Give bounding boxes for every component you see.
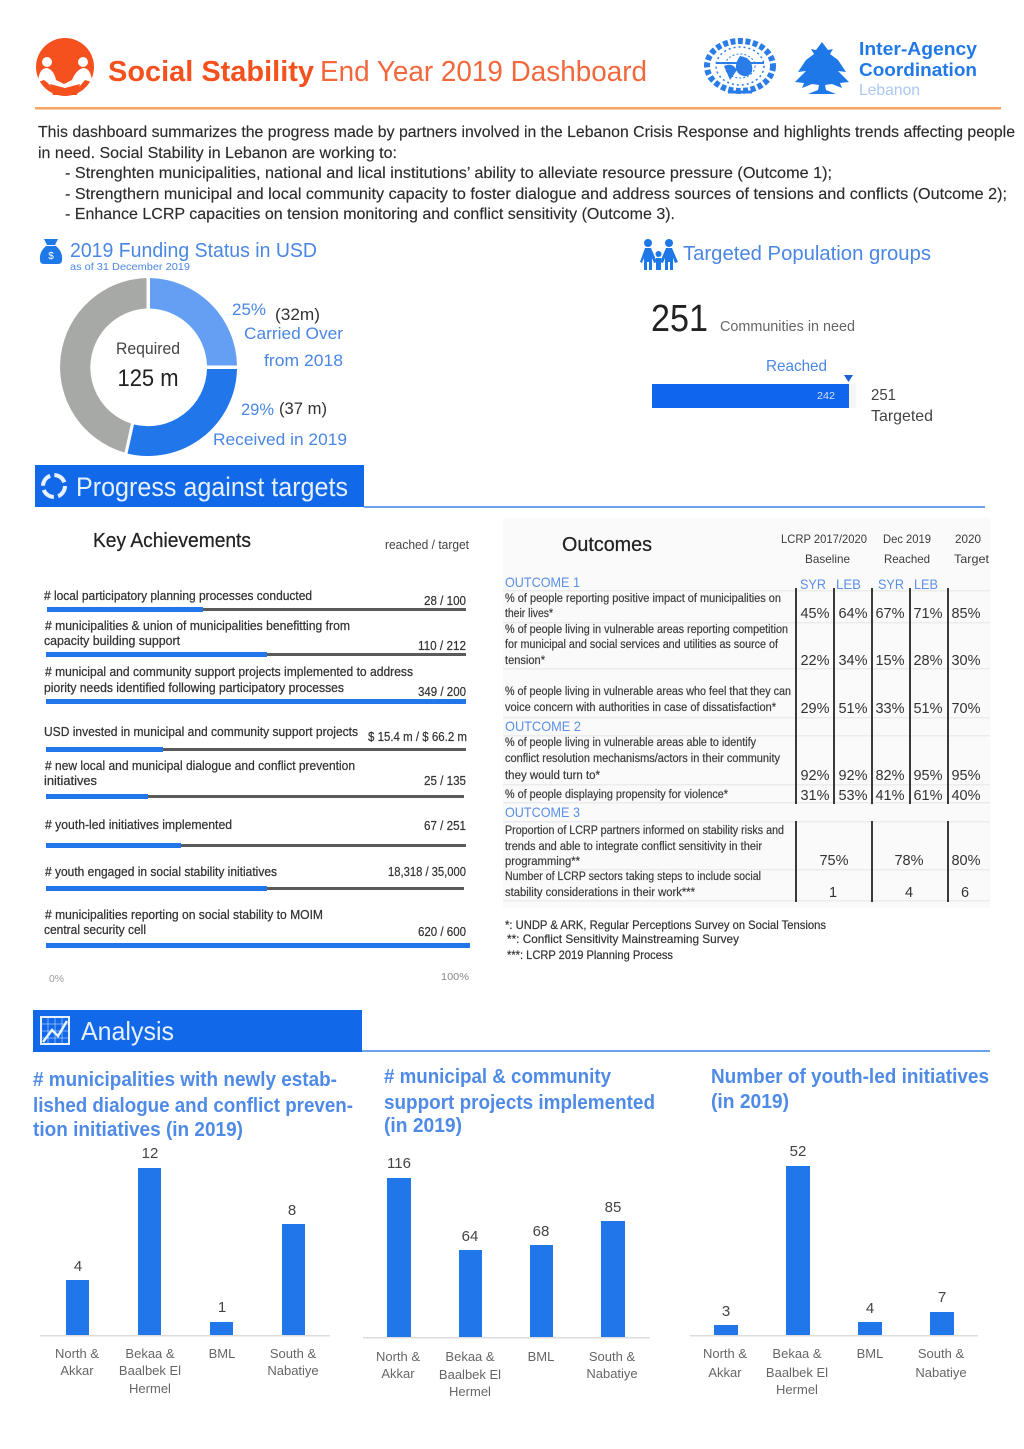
chart 3 title: (in 2019): [711, 1091, 789, 1113]
label: received: [213, 399, 347, 449]
icon: money bag: $: [48, 251, 54, 262]
row: youth-led initiatives: # youth-led initiatives implemented: [45, 817, 232, 832]
category labels: Baalbek El: [766, 1365, 828, 1380]
title: End Year 2019 Dashboard: [320, 56, 647, 88]
row: planning processes: 28 / 100: [424, 594, 466, 608]
row: LCRP partners informed: 75%: [819, 853, 849, 869]
panel: targeted population: [640, 239, 933, 425]
chart 1 title: [33, 1069, 353, 1141]
row: competition: [505, 624, 981, 669]
row: conflict resolution: 95%: [913, 768, 943, 784]
label: received: 29%: [241, 400, 274, 419]
axis: 0% to 100%: 100%: [441, 971, 469, 983]
progress bar: reached 242 of 251: Reached: [766, 358, 827, 375]
category labels: Nabatiye: [267, 1363, 319, 1378]
chart 3 title: Number of youth-led initiatives: [711, 1066, 989, 1088]
row: positive impact: [505, 593, 981, 622]
value labels: 7: [938, 1289, 946, 1306]
column headers: 2020: [955, 532, 981, 546]
key achievements heading: Key Achievements: [93, 530, 251, 552]
outcome 1 label: OUTCOME 1: [505, 574, 580, 590]
row: capacity building: # municipalities & union of municipalities benefitting from: [45, 618, 350, 633]
category labels: Nabatiye: [915, 1365, 967, 1380]
label: carried over: (32m): [275, 305, 320, 324]
category labels: Bekaa &: [772, 1346, 822, 1361]
panel: funding status: [40, 239, 347, 456]
row: planning processes: [44, 588, 466, 612]
category labels: BML: [528, 1349, 554, 1364]
value labels: [722, 1143, 946, 1320]
row: propensity for violence: 61%: [913, 788, 943, 804]
column headers: Baseline: [805, 552, 850, 566]
logo text: Inter-Agency Coordination Lebanon: Inter-Agency: [859, 39, 977, 59]
chart 2 title: # municipal & community: [384, 1066, 612, 1088]
bars: [714, 1166, 954, 1335]
axis: 0% to 100%: [49, 971, 469, 985]
value labels: 116: [387, 1155, 411, 1172]
row: voice concern: 51%: [838, 701, 868, 717]
banner: progress against targets: Progress against targets: [76, 472, 348, 502]
value labels: 12: [142, 1145, 158, 1162]
panel: outcomes table: [503, 518, 990, 908]
row: voice concern: % of people living in vulnerable areas who feel that they can: [505, 686, 791, 698]
row: dialogue initiatives: 25 / 135: [424, 774, 466, 788]
row: positive impact: % of people reporting positive impact of municipalities on: [505, 593, 781, 605]
row: dialogue initiatives: # new local and municipal dialogue and conflict prevention: [45, 758, 355, 773]
value labels: 3: [722, 1303, 730, 1320]
funding date: as of 31 December 2019: [70, 261, 190, 273]
row: positive impact: 67%: [875, 606, 905, 622]
category labels: Bekaa &: [125, 1346, 175, 1361]
value labels: 52: [790, 1143, 806, 1160]
row: MOIM reporting: [44, 907, 470, 948]
value labels: 8: [288, 1202, 296, 1219]
category labels: Baalbek El: [119, 1363, 181, 1378]
donut chart: [60, 278, 237, 456]
row: dialogue initiatives: initiatives: [44, 773, 97, 788]
row: voice concern: 51%: [913, 701, 943, 717]
row: LCRP sectors: stability considerations in their work***: [505, 887, 696, 899]
icon: family: [640, 239, 678, 270]
row: LCRP sectors: 4: [905, 885, 913, 901]
intro text: This dashboard summarizes the progress made by partners involved in the Lebanon Crisis Response and highlights trends affecting people: [38, 124, 1015, 141]
value labels: [387, 1155, 621, 1245]
label: carried over: [232, 300, 343, 370]
row: conflict resolution: 95%: [951, 768, 981, 784]
category labels: Akkar: [381, 1366, 415, 1381]
column headers: LCRP 2017/2020: [781, 532, 867, 546]
banner: analysis: [33, 1010, 990, 1052]
donut chart: Required: [116, 340, 180, 358]
footnotes: *: UNDP & ARK, Regular Perceptions Survey on Social Tensions: [505, 918, 826, 932]
row: support projects: piority needs identified following participatory processes: [44, 680, 344, 695]
chart 3: youth-led initiatives: [690, 1066, 989, 1397]
label: carried over: Carried Over: [244, 324, 343, 343]
row: USD invested: [44, 724, 467, 752]
row: LCRP sectors: 1: [829, 885, 837, 901]
chart 1 title: lished dialogue and conflict preven-: [33, 1095, 353, 1117]
category labels: BML: [209, 1346, 235, 1361]
row: positive impact: 64%: [838, 606, 868, 622]
row: USD invested: $ 15.4 m / $ 66.2 m: [368, 730, 467, 744]
column headers: Dec 2019: [883, 532, 931, 546]
chart 1: municipalities with dialogue initiatives: [33, 1069, 353, 1396]
row: LCRP partners informed: [505, 825, 981, 869]
icon: money bag: [40, 239, 62, 264]
row: LCRP sectors: Number of LCRP sectors taking steps to include social: [505, 871, 761, 883]
column headers: Reached: [884, 552, 930, 566]
row: LCRP sectors: 6: [961, 885, 969, 901]
category labels: [703, 1346, 967, 1397]
row: conflict resolution: conflict resolution mechanisms/actors in their community: [505, 753, 780, 765]
logo text: Inter-Agency Coordination Lebanon: [859, 39, 977, 99]
banner: progress against targets: [35, 465, 985, 508]
icon: line chart: [41, 1017, 69, 1044]
chart 1 title: tion initiatives (in 2019): [33, 1119, 243, 1141]
row: propensity for violence: [505, 788, 981, 804]
row: capacity building: capacity building support: [44, 633, 180, 648]
outcome 2 label: OUTCOME 2: [505, 718, 581, 734]
footnotes: [505, 918, 826, 962]
column label: reached / target: reached / target: [385, 537, 469, 552]
category labels: BML: [857, 1346, 883, 1361]
population heading: Targeted Population groups: [683, 243, 931, 265]
row: propensity for violence: 41%: [875, 788, 905, 804]
row: conflict resolution: % of people living in vulnerable areas able to identify: [505, 737, 756, 749]
row: conflict resolution: [505, 737, 981, 784]
row: competition: for municipal and social services and utilities as source of: [505, 639, 779, 651]
intro text: [38, 124, 1015, 223]
label: carried over: 25%: [232, 300, 266, 319]
row: competition: 22%: [800, 653, 830, 669]
logo text: Inter-Agency Coordination Lebanon: Coordination: [859, 60, 977, 80]
category labels: Hermel: [449, 1384, 491, 1399]
row: conflict resolution: 92%: [800, 768, 830, 784]
row: voice concern: [505, 686, 981, 717]
row: positive impact: 71%: [913, 606, 943, 622]
row: MOIM reporting: # municipalities reporting on social stability to MOIM: [45, 907, 323, 922]
icon: cedar tree: [795, 42, 849, 94]
donut chart: 125 m: [118, 365, 178, 392]
row: voice concern: 29%: [800, 701, 830, 717]
row: MOIM reporting: 620 / 600: [418, 925, 466, 939]
category labels: South &: [918, 1346, 964, 1361]
stat: communities in need: 251: [651, 298, 708, 340]
column headers: [781, 532, 990, 592]
row: capacity building: 110 / 212: [418, 639, 466, 653]
icon: UN emblem: [707, 41, 773, 92]
bars: [387, 1178, 625, 1337]
row: competition: tension*: [505, 655, 546, 667]
row: positive impact: 45%: [800, 606, 830, 622]
row: voice concern: 70%: [951, 701, 981, 717]
value labels: 64: [462, 1228, 478, 1245]
row: LCRP partners informed: programming**: [505, 856, 581, 868]
chart 2: municipal and community support projects: [363, 1066, 655, 1399]
logo text: Inter-Agency Coordination Lebanon: Lebanon: [859, 82, 920, 99]
category labels: Bekaa &: [445, 1349, 495, 1364]
outcome 3 label: OUTCOME 3: [505, 804, 580, 820]
category labels: North &: [376, 1349, 420, 1364]
chart 2 title: (in 2019): [384, 1115, 462, 1137]
label: received: (37 m): [279, 399, 327, 418]
row: LCRP partners informed: Proportion of LCRP partners informed on stability risks and: [505, 825, 784, 837]
row: planning processes: # local participatory planning processes conducted: [44, 588, 312, 603]
column headers: LEB: [914, 576, 938, 592]
label: received: Received in 2019: [213, 430, 347, 449]
row: youth engaged: [45, 864, 466, 891]
chart 2 title: [384, 1066, 655, 1137]
footnotes: **: Conflict Sensitivity Mainstreaming Survey: [507, 932, 739, 946]
footnotes: ***: LCRP 2019 Planning Process: [507, 948, 673, 962]
label: carried over: from 2018: [264, 351, 343, 370]
category labels: [55, 1346, 319, 1396]
row: competition: 34%: [838, 653, 868, 669]
row: LCRP partners informed: 78%: [894, 853, 924, 869]
row: LCRP partners informed: trends and able to integrate conflict sensitivity in their: [505, 841, 762, 853]
chart 2 title: support projects implemented: [384, 1092, 655, 1114]
value labels: 85: [605, 1199, 621, 1216]
row: USD invested: USD invested in municipal and community support projects: [44, 724, 358, 739]
row: competition: 15%: [875, 653, 905, 669]
row: conflict resolution: they would turn to*: [505, 770, 601, 782]
value labels: 68: [533, 1223, 549, 1240]
row: dialogue initiatives: [44, 758, 466, 799]
row: competition: % of people living in vulnerable areas reporting competition: [505, 624, 788, 636]
progress bar: reached 242 of 251: [652, 358, 933, 425]
column headers: SYR: [800, 576, 826, 592]
stat: communities in need: [651, 298, 855, 340]
value labels: 4: [866, 1300, 874, 1317]
category labels: North &: [55, 1346, 99, 1361]
row: propensity for violence: 31%: [800, 788, 830, 804]
row: positive impact: their lives*: [505, 608, 553, 620]
bars: [66, 1168, 305, 1335]
row: support projects: 349 / 200: [418, 685, 466, 699]
value labels: 1: [218, 1299, 226, 1316]
row: conflict resolution: 92%: [838, 768, 868, 784]
row: competition: 28%: [913, 653, 943, 669]
column headers: SYR: [878, 576, 904, 592]
category labels: South &: [270, 1346, 316, 1361]
category labels: Hermel: [129, 1381, 171, 1396]
row: capacity building: [44, 618, 466, 657]
intro text: - Strengthern municipal and local community capacity to foster dialogue and address sources of tensions and conflicts (Outcome 2);: [65, 186, 1007, 203]
intro text: - Strenghten municipalities, national and lical institutions’ ability to alleviate resource pressure (Outcome 1);: [65, 165, 832, 182]
value labels: 4: [74, 1258, 82, 1275]
funding heading: 2019 Funding Status in USD: [70, 240, 317, 262]
row: youth engaged: # youth engaged in social stability initiatives: [45, 864, 277, 879]
intro text: in need. Social Stability in Lebanon are working to:: [38, 145, 397, 162]
column headers: Target: [954, 552, 990, 566]
category labels: South &: [589, 1349, 635, 1364]
category labels: [376, 1349, 638, 1399]
category labels: Baalbek El: [439, 1367, 501, 1382]
row: LCRP partners informed: 80%: [951, 853, 981, 869]
category labels: Hermel: [776, 1382, 818, 1397]
row: positive impact: 85%: [951, 606, 981, 622]
chart 1 title: # municipalities with newly estab-: [33, 1069, 337, 1091]
chart 3 title: [711, 1066, 989, 1113]
column headers: LEB: [836, 576, 861, 592]
row: support projects: [44, 664, 466, 704]
row: MOIM reporting: central security cell: [44, 922, 146, 937]
value labels: [74, 1145, 296, 1316]
row: voice concern: voice concern with authorities in case of dissatisfaction*: [505, 702, 777, 714]
row: competition: 30%: [951, 653, 981, 669]
icon: circular arrows: [43, 475, 65, 497]
row: propensity for violence: 53%: [838, 788, 868, 804]
outcomes heading: Outcomes: [562, 534, 652, 556]
row: voice concern: 33%: [875, 701, 905, 717]
title: [108, 56, 647, 88]
banner: analysis: Analysis: [81, 1016, 174, 1046]
icon: social stability logo: [36, 38, 94, 96]
title: Social Stability: [108, 56, 314, 88]
category labels: Akkar: [60, 1363, 94, 1378]
axis: 0% to 100%: 0%: [49, 974, 64, 985]
progress bar: reached 242 of 251: Targeted: [871, 408, 933, 425]
row: youth-led initiatives: [45, 817, 466, 848]
row: propensity for violence: % of people displaying propensity for violence*: [505, 789, 728, 801]
panel: key achievements: [44, 530, 470, 985]
progress bar: reached 242 of 251: 242: [817, 391, 835, 402]
category labels: Nabatiye: [586, 1366, 638, 1381]
intro text: - Enhance LCRP capacities on tension monitoring and conflict sensitivity (Outcome 3).: [65, 206, 675, 223]
row: youth engaged: 18,318 / 35,000: [388, 865, 466, 879]
category labels: Akkar: [708, 1365, 742, 1380]
stat: communities in need: Communities in need: [720, 318, 855, 335]
progress bar: reached 242 of 251: 251: [871, 387, 896, 404]
category labels: North &: [703, 1346, 747, 1361]
row: propensity for violence: 40%: [951, 788, 981, 804]
row: LCRP sectors: [505, 871, 969, 901]
row: conflict resolution: 82%: [875, 768, 905, 784]
row: youth-led initiatives: 67 / 251: [424, 819, 466, 833]
row: support projects: # municipal and community support projects implemented to address: [45, 664, 413, 679]
